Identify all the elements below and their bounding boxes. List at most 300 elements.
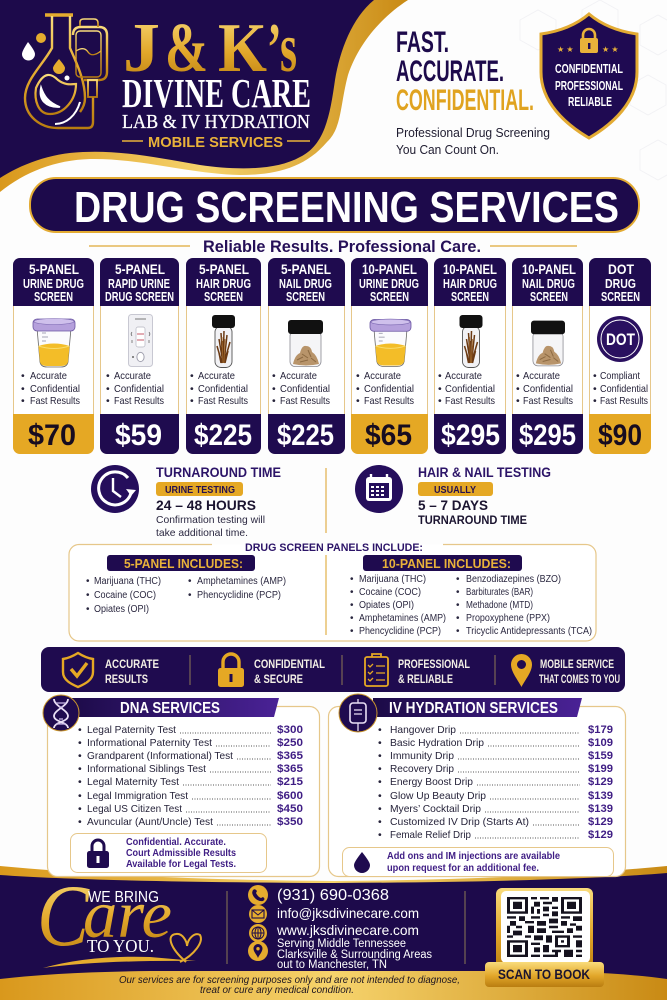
card: 10-panel hair: SCREEN — [451, 290, 489, 304]
title bar — [30, 178, 639, 232]
benefits list — [190, 370, 248, 407]
card: 5-panel rapid urine: DRUG SCREEN — [105, 290, 174, 304]
10-panel list: Cocaine (COC) — [359, 587, 421, 598]
icon: DOT seal — [597, 316, 643, 362]
price list: • — [378, 750, 382, 762]
QR code — [507, 897, 582, 957]
price list: $250 — [277, 737, 303, 749]
card: 10-panel urine: URINE DRUG — [359, 277, 419, 291]
icon: padlock — [218, 654, 244, 687]
icon: web — [249, 924, 267, 942]
icon: test cassette — [128, 314, 152, 366]
benefits list: Fast Results — [280, 395, 330, 407]
label: TURNAROUND TIME — [418, 513, 527, 527]
price list: $159 — [588, 750, 613, 762]
turnaround: urine — [91, 465, 281, 539]
benefits list: • — [272, 395, 276, 407]
QR booking block — [485, 888, 604, 987]
benefits list — [21, 370, 80, 407]
benefits list: Accurate — [523, 370, 560, 382]
price list: Legal US Citizen Test — [87, 803, 182, 815]
price list: • — [78, 724, 82, 736]
purple banner shape — [0, 0, 374, 178]
icon: IV bag — [339, 694, 377, 732]
5-panel list: • — [86, 590, 90, 601]
price list — [378, 724, 613, 841]
script letter C: C — [37, 868, 90, 965]
10-panel list: • — [350, 587, 354, 598]
benefits list: • — [438, 383, 442, 395]
benefits list: Confidential — [280, 383, 330, 395]
section title: DNA SERVICES — [120, 700, 220, 717]
icon: phone — [248, 885, 268, 905]
website: www.jksdivinecare.com — [276, 922, 419, 938]
icon: white dot — [64, 76, 70, 80]
price list: $179 — [588, 724, 613, 736]
benefits list: Fast Results — [523, 395, 573, 407]
slogan subtext — [396, 125, 550, 157]
stars: ★ ★ — [602, 45, 619, 54]
benefits list: Accurate — [198, 370, 235, 382]
benefits list: • — [190, 383, 194, 395]
price list: $129 — [588, 829, 613, 841]
price list: • — [78, 790, 82, 802]
benefits list: • — [106, 370, 110, 382]
benefits list: • — [272, 370, 276, 382]
benefits list: Accurate — [364, 370, 401, 382]
5-panel list: • — [188, 590, 192, 601]
callout text: upon request for an additional fee. — [387, 863, 539, 874]
icon: gold drop — [53, 59, 65, 74]
benefits list: • — [516, 370, 520, 382]
10-panel list: Propoxyphene (PPX) — [466, 613, 550, 624]
card: DOT: SCREEN — [601, 290, 640, 304]
panel: IV hydration services — [328, 694, 626, 876]
subtitle: Reliable Results. Professional Care. — [203, 238, 481, 256]
benefits list: • — [438, 395, 442, 407]
shield badge — [541, 14, 637, 138]
price list: • — [378, 816, 382, 828]
mobile services line: MOBILE SERVICES — [148, 134, 283, 151]
price list: Hangover Drip — [390, 724, 456, 736]
icon: location — [248, 941, 268, 961]
price: $65 — [365, 419, 412, 452]
phone number: (931) 690-0368 — [277, 887, 389, 904]
5-panel list: Cocaine (COC) — [94, 590, 156, 601]
10-panel list: • — [350, 613, 354, 624]
callout — [70, 834, 266, 872]
10-panel list: Benzodiazepines (BZO) — [466, 574, 561, 585]
callout text — [126, 837, 236, 870]
benefits list — [106, 370, 164, 407]
benefits list: • — [516, 383, 520, 395]
price list: • — [378, 763, 382, 775]
heading: TURNAROUND TIME — [156, 465, 281, 480]
price list: $199 — [588, 763, 613, 775]
10-panel list: Opiates (OPI) — [359, 600, 414, 611]
price list: $129 — [588, 816, 613, 828]
icon: white crescent — [40, 87, 60, 107]
callout text: Confidential. Accurate. — [126, 837, 226, 848]
callout — [342, 848, 614, 876]
benefits list: • — [21, 383, 25, 395]
icon: drop — [354, 852, 370, 873]
price: $295 — [441, 419, 500, 452]
price list: $215 — [277, 776, 303, 788]
card: 5-panel urine: SCREEN — [34, 290, 73, 304]
benefits list: Fast Results — [364, 395, 414, 407]
QR frame — [496, 888, 593, 972]
panel heading: DRUG SCREEN PANELS INCLUDE: — [245, 542, 423, 554]
brand name Divine Care: DIVINE CARE — [122, 70, 311, 116]
heart — [171, 934, 201, 962]
service area: Serving Middle Tennessee — [277, 938, 406, 950]
card: 5-panel hair: 5-PANEL — [199, 261, 249, 277]
benefits list — [438, 370, 495, 407]
text — [105, 657, 159, 686]
pill — [418, 482, 493, 496]
icon: white arc — [55, 102, 80, 124]
gold swoosh edge — [0, 0, 408, 192]
slogan subtext: Professional Drug Screening — [396, 125, 550, 140]
price list: $600 — [277, 790, 303, 802]
card: 10-panel nail: NAIL DRUG — [522, 277, 575, 291]
benefits list: • — [593, 370, 597, 382]
price: $90 — [598, 419, 642, 452]
text: ACCURATE — [105, 657, 159, 671]
email: info@jksdivinecare.com — [277, 905, 419, 921]
scan button — [485, 962, 604, 987]
text: & SECURE — [254, 672, 303, 686]
price list: Legal Immigration Test — [87, 790, 188, 802]
icon: padlock — [87, 840, 109, 868]
swoosh — [43, 957, 196, 968]
brand tagline: LAB & IV HYDRATION — [122, 111, 310, 133]
benefits list: • — [190, 370, 194, 382]
callout text: Court Admissible Results — [126, 848, 236, 859]
benefits list — [356, 370, 414, 407]
slogan: fast: FAST. — [396, 26, 449, 59]
price list: • — [78, 816, 82, 828]
we bring: WE BRING — [88, 889, 159, 906]
benefits list — [272, 370, 330, 407]
section title: IV HYDRATION SERVICES — [389, 700, 558, 717]
price list: • — [378, 829, 382, 841]
10-panel label: 10-PANEL INCLUDES: — [382, 556, 511, 571]
service area: Clarksville & Surrounding Areas — [277, 949, 432, 961]
price list: • — [78, 763, 82, 775]
price list: Informational Siblings Test — [87, 763, 206, 775]
price list: $139 — [588, 803, 613, 815]
disclaimer — [119, 974, 460, 996]
price list: $450 — [277, 803, 303, 815]
benefits list: • — [272, 383, 276, 395]
icon: white drop — [22, 42, 35, 60]
icon: calendar — [355, 465, 403, 513]
card: 5-panel nail: NAIL DRUG — [279, 277, 332, 291]
benefits list: • — [106, 395, 110, 407]
price list: • — [378, 724, 382, 736]
price: $225 — [277, 419, 334, 452]
price list: Avuncular (Aunt/Uncle) Test — [87, 816, 213, 828]
price list: Legal Maternity Test — [87, 776, 179, 788]
price list: • — [378, 737, 382, 749]
scan text: SCAN TO BOOK — [498, 966, 590, 982]
benefits list: Fast Results — [600, 395, 648, 407]
card: 10-panel urine: 10-PANEL — [362, 261, 417, 277]
benefits list: Confidential — [600, 383, 648, 395]
benefits list: Fast Results — [198, 395, 248, 407]
price: $295 — [519, 419, 576, 452]
price list: $300 — [277, 724, 303, 736]
benefits list: • — [106, 383, 110, 395]
disclaimer: treat or cure any medical condition. — [200, 984, 354, 996]
benefits list: • — [356, 383, 360, 395]
to you: TO YOU. — [87, 936, 154, 956]
service area — [277, 938, 432, 971]
icon: padlock — [580, 29, 598, 53]
benefits list: Accurate — [280, 370, 317, 382]
pill text: URINE TESTING — [165, 485, 235, 496]
10-panel list: Tricyclic Antidepressants (TCA) — [466, 626, 592, 637]
card: 5-panel hair — [186, 258, 261, 454]
price list: • — [78, 803, 82, 815]
benefits list: Fast Results — [445, 395, 495, 407]
benefits list: Fast Results — [30, 395, 80, 407]
price list: Glow Up Beauty Drip — [390, 790, 486, 802]
brand name J & K's: J — [123, 10, 160, 87]
price: $225 — [194, 419, 252, 452]
header: logo banner — [0, 0, 408, 192]
text: CONFIDENTIAL — [254, 657, 325, 671]
card: 5-panel rapid urine: RAPID URINE — [108, 277, 170, 291]
10-panel list: • — [350, 626, 354, 637]
price list: • — [78, 737, 82, 749]
shield shape — [541, 14, 637, 138]
icon: map pin — [511, 654, 532, 687]
footer backdrop — [0, 866, 667, 1000]
text: PROFESSIONAL — [398, 657, 470, 671]
icon: clock — [91, 465, 139, 513]
footer slogan — [37, 868, 201, 968]
card: 5-panel urine: 5-PANEL — [29, 261, 79, 277]
brand name J & K's: ’s — [267, 10, 297, 87]
benefits list: Confidential — [30, 383, 80, 395]
icon: DNA — [43, 695, 79, 731]
10-panel list: Marijuana (THC) — [359, 574, 426, 585]
price list: • — [378, 776, 382, 788]
icon: email — [249, 905, 267, 923]
text — [398, 657, 470, 686]
panel: DNA services — [43, 695, 320, 876]
icon: hair vial — [212, 315, 235, 368]
hours: 24 – 48 HOURS — [156, 497, 256, 513]
price list: Myers’ Cocktail Drip — [390, 803, 481, 815]
card: 10-panel nail — [512, 258, 583, 454]
slogan: confidential: CONFIDENTIAL. — [396, 84, 534, 117]
10-panel list: • — [456, 574, 460, 585]
icon: clipboard — [365, 654, 388, 686]
card: 10-panel nail: 10-PANEL — [522, 261, 576, 277]
benefits list: Compliant — [600, 370, 640, 382]
brand name J & K's: & — [165, 10, 208, 87]
card: 10-panel urine — [351, 258, 428, 454]
card: 10-panel urine: SCREEN — [370, 290, 409, 304]
price list: Customized IV Drip (Starts At) — [390, 816, 529, 828]
price: $70 — [28, 419, 76, 452]
price list: • — [78, 750, 82, 762]
shield words: RELIABLE — [568, 94, 612, 109]
text: RESULTS — [105, 672, 148, 686]
10-panel list: • — [456, 613, 460, 624]
benefits list: Confidential — [445, 383, 495, 395]
benefits list: Confidential — [364, 383, 414, 395]
slogan: accurate: ACCURATE. — [396, 55, 504, 88]
pill — [156, 482, 243, 496]
card: 5-panel urine: URINE DRUG — [23, 277, 84, 291]
icon: nail jar — [531, 321, 565, 366]
icon: hair vial — [460, 315, 482, 368]
5-panel list: Amphetamines (AMP) — [197, 576, 286, 587]
card: DOT: DRUG — [605, 277, 636, 291]
gold band — [0, 866, 667, 1000]
contact block — [248, 885, 432, 971]
benefits list: Confidential — [523, 383, 573, 395]
10-panel list: • — [456, 587, 460, 598]
10-panel list: • — [456, 600, 460, 611]
benefits list: Confidential — [114, 383, 164, 395]
slogan subtext: You Can Count On. — [396, 142, 499, 157]
script letters are: are — [83, 876, 172, 952]
brand name J & K's — [123, 10, 297, 87]
price list: $365 — [277, 750, 303, 762]
benefits list: • — [593, 383, 597, 395]
benefits list: • — [356, 395, 360, 407]
card: 5-panel rapid urine: 5-PANEL — [115, 261, 165, 277]
price list — [78, 724, 303, 828]
card: DOT — [589, 258, 651, 454]
price list: Legal Paternity Test — [87, 724, 176, 736]
card: 5-panel rapid urine — [100, 258, 179, 454]
callout text: Add ons and IM injections are available — [387, 851, 560, 862]
10-panel list: Barbiturates (BAR) — [466, 587, 533, 598]
heading: HAIR & NAIL TESTING — [418, 465, 551, 480]
price list: $139 — [588, 790, 613, 802]
note: Confirmation testing will — [156, 514, 265, 526]
pill text: USUALLY — [434, 485, 476, 496]
text: & RELIABLE — [398, 672, 453, 686]
service area: out to Manchester, TN — [277, 959, 387, 971]
card: 10-panel nail: SCREEN — [530, 290, 568, 304]
icon: shield check — [63, 653, 93, 687]
card: 5-panel urine — [13, 258, 94, 454]
price list: Recovery Drip — [390, 763, 454, 775]
benefits list: • — [516, 395, 520, 407]
ribbon — [373, 698, 582, 717]
5-panel list: Phencyclidine (PCP) — [197, 590, 281, 601]
10-panel list: • — [456, 626, 460, 637]
background hexagon pattern — [520, 0, 667, 180]
card: 5-panel nail — [268, 258, 345, 454]
stars: ★ ★ — [557, 45, 574, 54]
shield words — [555, 61, 623, 109]
benefits list: • — [356, 370, 360, 382]
note — [156, 514, 265, 539]
icon: urine cup — [370, 319, 411, 366]
shield words: CONFIDENTIAL — [555, 61, 623, 76]
icon: urine cup — [33, 318, 75, 367]
brand name J & K's: K — [218, 10, 267, 87]
price list: • — [378, 803, 382, 815]
benefits list: • — [438, 370, 442, 382]
text — [539, 657, 620, 686]
price list: $109 — [588, 737, 613, 749]
card: 10-panel hair: 10-PANEL — [443, 261, 497, 277]
logo icon: flask and IV bag — [25, 15, 107, 128]
text — [254, 657, 325, 686]
callout text — [387, 851, 560, 874]
price list: Immunity Drip — [390, 750, 454, 762]
10-panel list — [350, 574, 592, 637]
10-panel list: Phencyclidine (PCP) — [359, 626, 441, 637]
price list: • — [378, 790, 382, 802]
card: 10-panel hair: HAIR DRUG — [443, 277, 497, 291]
card: 5-panel nail: 5-PANEL — [281, 261, 331, 277]
callout text: Available for Legal Tests. — [126, 859, 236, 870]
shield words: PROFESSIONAL — [555, 78, 623, 93]
card: 5-panel hair: SCREEN — [204, 290, 243, 304]
icon: DOT seal: DOT — [606, 330, 635, 349]
icon: nail jar — [288, 320, 323, 366]
5-panel list: • — [86, 576, 90, 587]
price list: $129 — [588, 776, 613, 788]
text: THAT COMES TO YOU — [539, 672, 620, 686]
benefits banner — [41, 647, 625, 692]
price list: • — [78, 776, 82, 788]
purple band — [0, 873, 667, 979]
10-panel list: • — [350, 600, 354, 611]
price list: Grandparent (Informational) Test — [87, 750, 233, 762]
card: 5-panel hair: HAIR DRUG — [196, 277, 251, 291]
card: 10-panel hair — [434, 258, 506, 454]
note: take additional time. — [156, 527, 248, 539]
benefits list: • — [593, 395, 597, 407]
price list: Basic Hydration Drip — [390, 737, 484, 749]
benefits list: • — [21, 370, 25, 382]
icon: gold ball — [36, 33, 46, 43]
10-panel list: Amphetamines (AMP) — [359, 613, 446, 624]
5-panel list: Opiates (OPI) — [94, 604, 149, 615]
10-panel list: • — [350, 574, 354, 585]
price list: Female Relief Drip — [390, 829, 471, 841]
price: $59 — [115, 419, 162, 452]
benefits list: Confidential — [198, 383, 248, 395]
disclaimer: Our services are for screening purposes only and are not intended to diagnose, — [119, 974, 460, 986]
price list: $350 — [277, 816, 303, 828]
benefits list: Accurate — [30, 370, 67, 382]
benefits list: • — [190, 395, 194, 407]
10-panel list: Methadone (MTD) — [466, 600, 533, 611]
ribbon — [63, 698, 279, 717]
benefits list: Accurate — [445, 370, 482, 382]
panel: drug screen panels — [69, 542, 596, 641]
price list: $365 — [277, 763, 303, 775]
5-panel label: 5-PANEL INCLUDES: — [124, 556, 243, 571]
card: DOT: DOT — [608, 261, 634, 277]
card: 5-panel nail: SCREEN — [286, 290, 325, 304]
text: MOBILE SERVICE — [540, 657, 614, 671]
price list: Energy Boost Drip — [390, 776, 473, 788]
